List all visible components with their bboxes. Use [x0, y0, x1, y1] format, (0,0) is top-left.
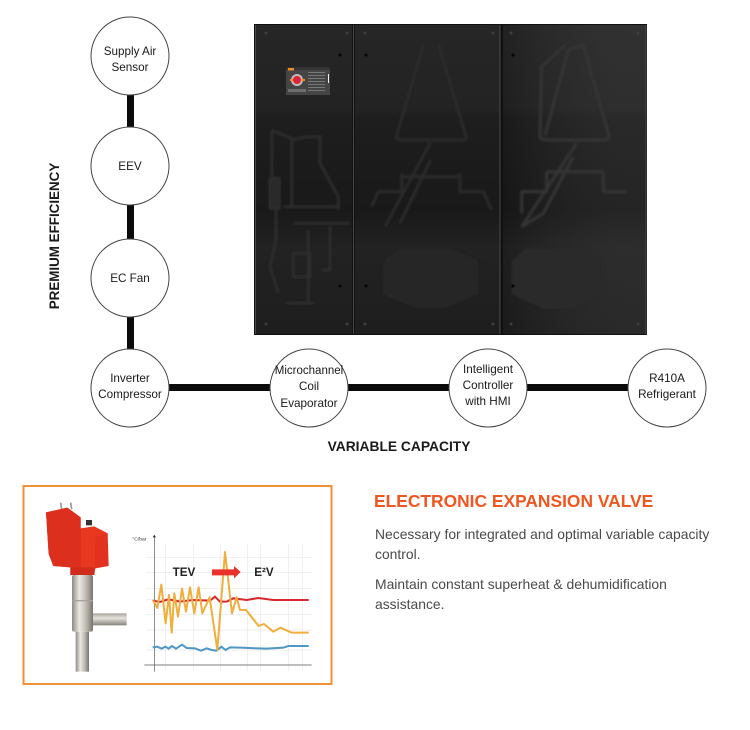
- icon: expansion valve: [46, 503, 127, 672]
- node: EC Fan: EC Fan: [110, 272, 150, 285]
- text block: variable capacity control: Necessary for integrated and optimal variable capacity: [375, 526, 709, 542]
- node: R410A Refrigerant: [628, 349, 706, 427]
- HMI touchscreen: [286, 67, 330, 95]
- connector: horizontal capacity line: [130, 384, 667, 391]
- axis label: premium efficiency: PREMIUM EFFICIENCY: [47, 163, 62, 309]
- node: Microchannel Coil Evaporator: Microchannel: [275, 365, 343, 377]
- node: Intelligent Controller with HMI: [449, 349, 527, 427]
- node: Microchannel Coil Evaporator: Coil: [299, 380, 319, 393]
- connector: vertical efficiency line: [127, 56, 134, 388]
- text block: variable capacity control: control.: [375, 546, 421, 562]
- node: EEV: [91, 127, 169, 205]
- panel: right door with coil outline: [503, 25, 646, 334]
- node: R410A Refrigerant: R410A: [649, 372, 685, 385]
- node: Inverter Compressor: Compressor: [98, 388, 162, 401]
- cabinet: three-panel precision cooling unit: [254, 24, 647, 335]
- node: EC Fan: [91, 239, 169, 317]
- chart: superheat TEV to E2V: TEV: [173, 566, 196, 579]
- node: Supply Air Sensor: [91, 17, 169, 95]
- chart: superheat TEV to E2V: °C/bar: [132, 536, 147, 542]
- door seams: [256, 25, 646, 334]
- node: Inverter Compressor: [91, 349, 169, 427]
- panel: left door with HMI: [255, 25, 352, 334]
- node: EEV: EEV: [118, 160, 142, 173]
- axis label: variable capacity: VARIABLE CAPACITY: [328, 439, 470, 454]
- chart: superheat TEV to E2V: E²V: [254, 566, 274, 579]
- node: Supply Air Sensor: Sensor: [111, 61, 149, 74]
- node: Supply Air Sensor: Supply Air: [104, 45, 156, 58]
- text block: superheat and dehumidification: Maintain constant superheat & dehumidification: [375, 576, 667, 592]
- mounting screws: [338, 54, 514, 288]
- panel: valve image frame: [24, 486, 332, 684]
- heading: electronic expansion valve: ELECTRONIC EXPANSION VALVE: [374, 491, 653, 511]
- node: R410A Refrigerant: Refrigerant: [638, 388, 697, 401]
- node: Microchannel Coil Evaporator: Evaporator: [280, 397, 338, 410]
- chart: superheat TEV to E2V: [132, 535, 312, 672]
- text block: variable capacity control: [375, 526, 709, 562]
- panel: centre door with coil outline: [355, 25, 500, 334]
- text block: superheat and dehumidification: assistance.: [375, 596, 444, 612]
- node: Inverter Compressor: Inverter: [110, 372, 150, 385]
- node: Microchannel Coil Evaporator: [270, 349, 348, 427]
- node: Intelligent Controller with HMI: Intelligent: [463, 363, 514, 376]
- text block: superheat and dehumidification: [375, 576, 667, 612]
- node: Intelligent Controller with HMI: with HMI: [464, 395, 511, 408]
- node: Intelligent Controller with HMI: Controller: [463, 379, 513, 392]
